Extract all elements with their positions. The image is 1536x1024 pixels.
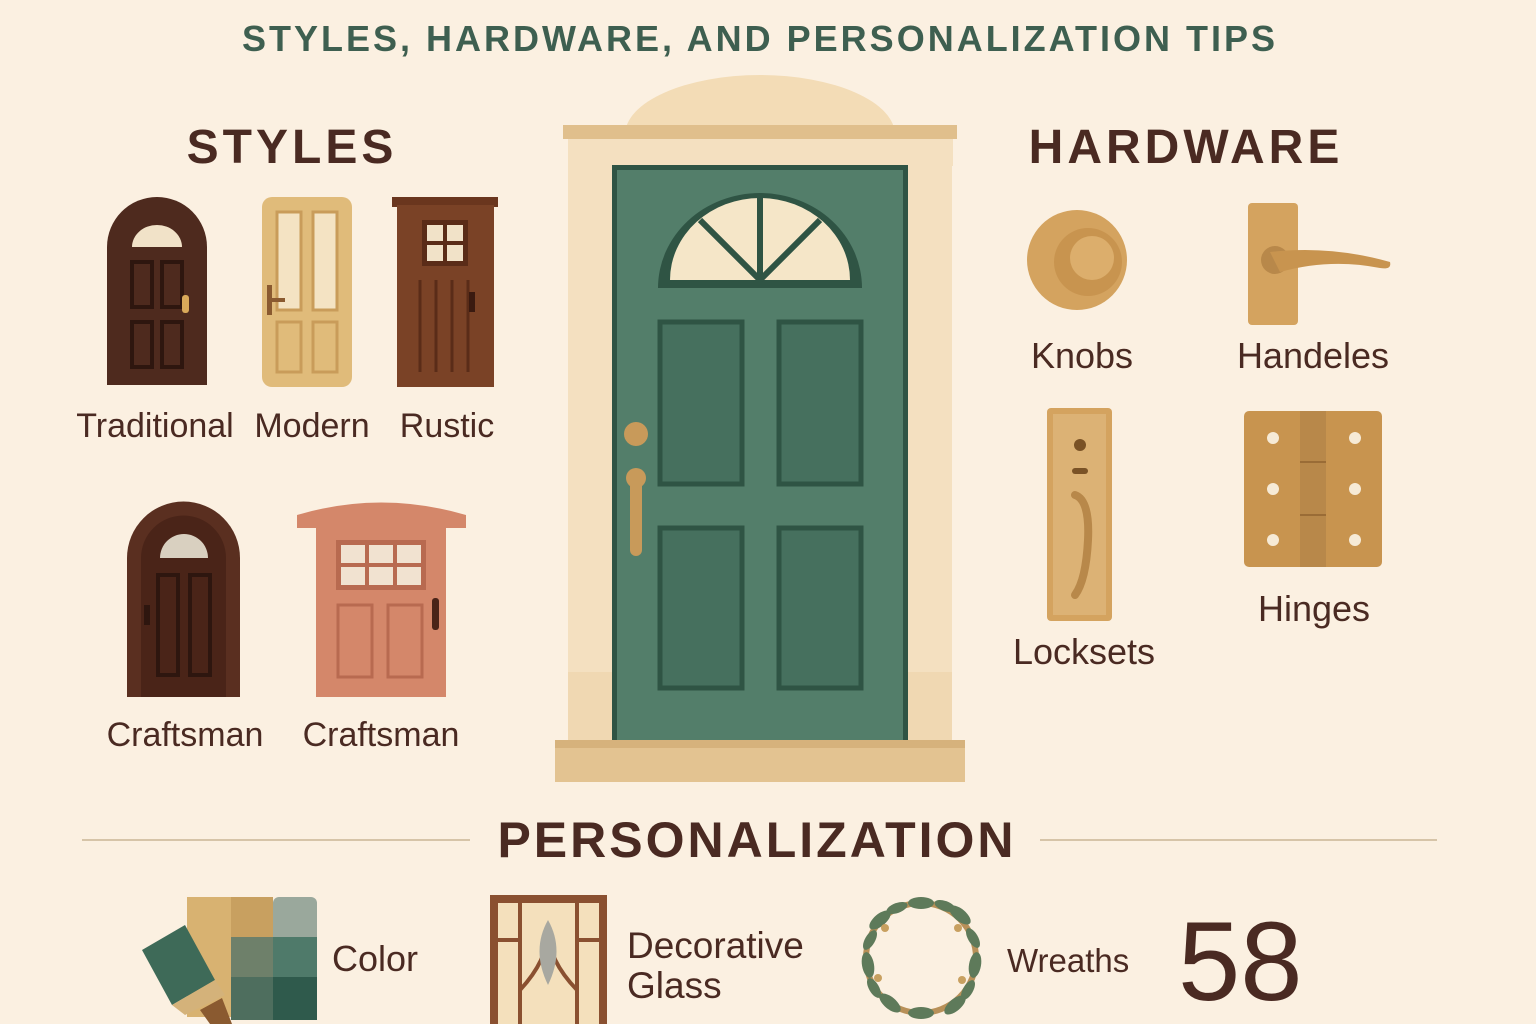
label: handeles: Handeles	[1237, 335, 1389, 376]
label: traditional: Traditional	[76, 407, 234, 445]
door: craftsman 1	[127, 502, 240, 697]
door: craftsman 2	[297, 502, 466, 697]
label: wreaths: Wreaths	[1007, 942, 1129, 979]
label: decorative glass: Decorative	[627, 925, 804, 966]
icon: knob	[1027, 210, 1127, 310]
icon: handle	[1248, 203, 1390, 325]
label: modern: Modern	[254, 407, 370, 445]
label: craftsman 2: Craftsman	[303, 716, 459, 754]
heading: hardware: HARDWARE	[1029, 121, 1343, 174]
label: rustic: Rustic	[400, 407, 494, 445]
label: knobs: Knobs	[1031, 335, 1133, 376]
label: color: Color	[332, 938, 418, 979]
text: Glass	[627, 965, 722, 1006]
title: STYLES, HARDWARE, AND PERSONALIZATION TIPS	[242, 18, 1278, 59]
icon: decorative glass	[490, 895, 607, 1024]
door: traditional	[107, 197, 207, 385]
label: craftsman 1: Craftsman	[107, 716, 263, 754]
icon: color swatches	[142, 897, 317, 1024]
center door	[555, 75, 965, 782]
label: hinges: Hinges	[1258, 588, 1370, 629]
label: locksets: Locksets	[1013, 631, 1155, 672]
icon: hinges	[1244, 411, 1382, 567]
door: rustic	[392, 197, 498, 387]
door: modern	[262, 197, 352, 387]
number: 58: 58	[1178, 899, 1303, 1024]
icon: lockset	[1047, 408, 1112, 621]
heading: personalization: PERSONALIZATION	[497, 812, 1017, 868]
heading: styles: STYLES	[187, 121, 397, 174]
icon: wreath	[860, 897, 983, 1019]
